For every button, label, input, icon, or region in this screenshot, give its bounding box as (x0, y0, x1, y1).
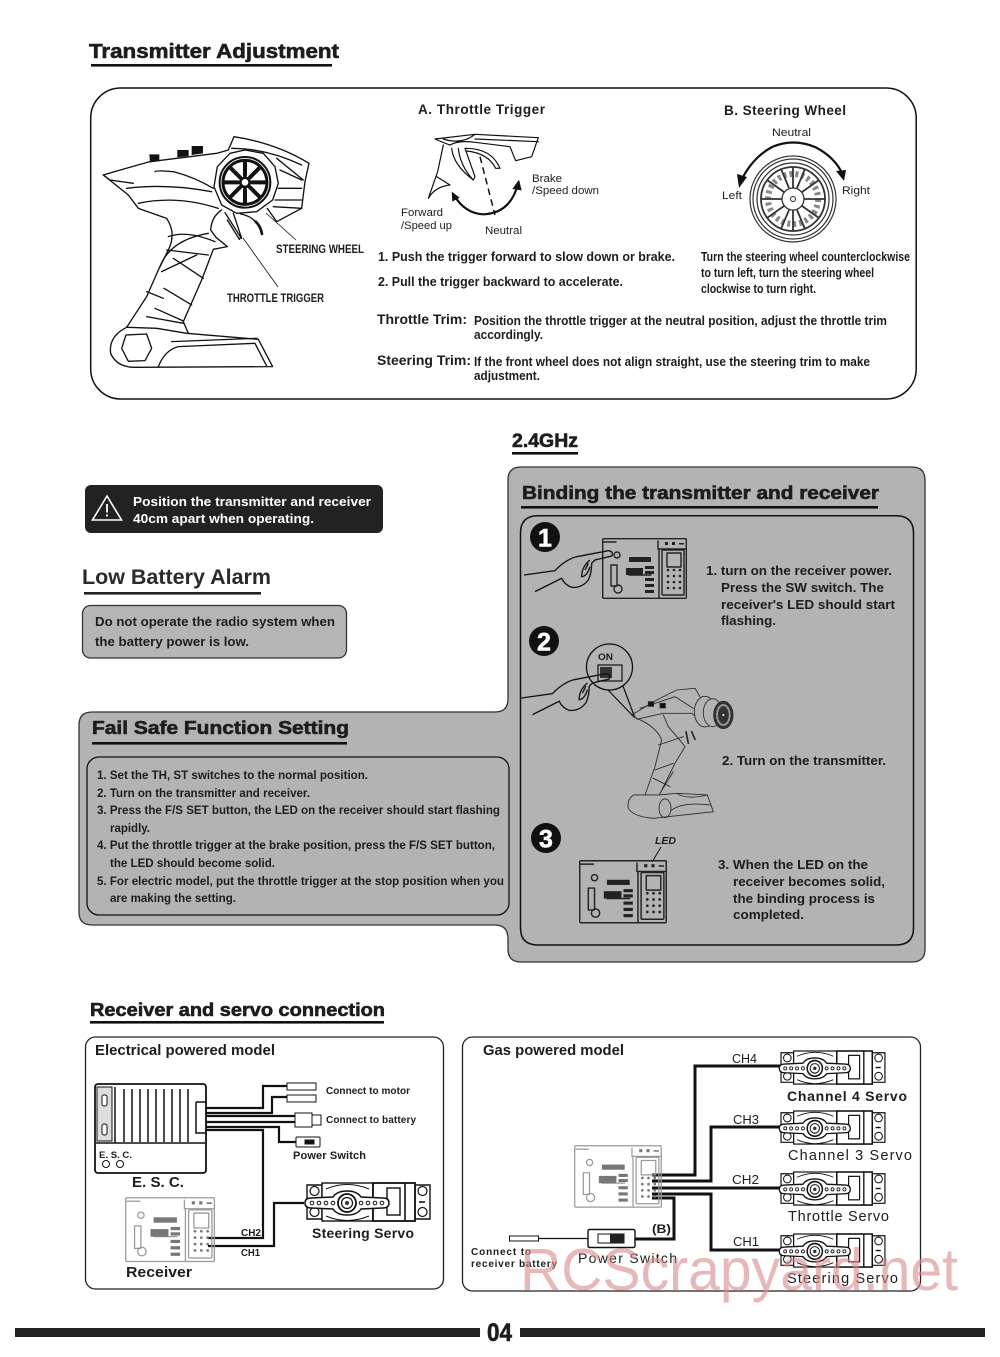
text: step 1: 1. turn on the receiver power. (706, 563, 892, 578)
heading: Low Battery Alarm: Low Battery Alarm (82, 566, 271, 589)
text: step 3: receiver becomes solid, (733, 874, 885, 889)
label: E.S.C.: E. S. C. (132, 1174, 184, 1191)
text: step 3 (718, 857, 885, 922)
step number 1 (530, 522, 560, 552)
labels: servos: Channel 3 Servo (788, 1148, 912, 1164)
labels: servos: Steering Servo (787, 1271, 898, 1287)
text: step 1: Press the SW switch. The (721, 580, 884, 595)
panel: fail safe steps: rapidly. (110, 821, 150, 835)
heading: Fail Safe Function Setting: Fail Safe Function Setting (92, 717, 349, 738)
heading: Gas powered model (483, 1043, 624, 1059)
callout: warning: Position the transmitter and receiver (133, 494, 371, 509)
wiring (635, 1066, 782, 1250)
text: throttle trim: Position the throttle trigger at the neutral position, adjust the throttle trim (474, 313, 887, 328)
icon: pressing hand (521, 674, 610, 715)
labels: channels: CH1 (733, 1234, 759, 1249)
connectors (287, 1083, 321, 1147)
icon: channel 4 servo (779, 1051, 885, 1084)
text: steering trim (377, 352, 870, 383)
footer: page number (15, 1319, 985, 1347)
labels: steering directions: Right (842, 185, 870, 197)
panel: transmitter adjustment (91, 88, 916, 399)
step number 1: 1 (538, 524, 552, 552)
wiring (206, 1086, 304, 1246)
labels: channels: CH4 (732, 1051, 757, 1066)
labels: connection targets (293, 1086, 416, 1162)
panel: low battery text: the battery power is low. (95, 634, 249, 649)
icon: power switch (510, 1230, 635, 1248)
step 3 (531, 823, 885, 923)
text: throttle instructions: 2. Pull the trigger backward to accelerate. (378, 274, 623, 289)
labels: steering directions (722, 127, 870, 202)
text: throttle instructions (378, 249, 675, 289)
watermark: RCScrapyard.net (520, 1237, 958, 1303)
step number 2: 2 (537, 628, 551, 656)
icon: E.S.C. unit (95, 1084, 206, 1173)
icon: channel 3 servo (779, 1111, 885, 1144)
panel: fail safe steps: the LED should become solid. (110, 856, 275, 870)
text: steering instructions (701, 250, 910, 296)
panel: fail safe steps: are making the setting. (110, 891, 236, 905)
panel: fail safe steps: 5. For electric model, put the throttle trigger at the stop position when you (97, 874, 504, 888)
text: step 3: completed. (733, 907, 804, 922)
label: STEERING WHEEL: STEERING WHEEL (276, 244, 364, 256)
icon: steering servo (305, 1183, 430, 1221)
labels: connection targets: Connect to motor (326, 1086, 410, 1097)
text: step 3: the binding process is (733, 891, 875, 906)
labels: throttle directions (401, 173, 599, 237)
panel: fail safe steps: 3. Press the F/S SET button, the LED on the receiver should start flashing (97, 803, 500, 817)
labels: throttle directions: Brake (532, 173, 562, 185)
illustration: transmitter (103, 137, 309, 367)
footer: page number: 04 (487, 1319, 512, 1347)
labels: power switch: Power Switch (578, 1250, 677, 1266)
labels: servos: Channel 4 Servo (787, 1088, 907, 1104)
label: STEERING WHEEL (266, 213, 364, 256)
step number 3 (531, 823, 561, 854)
icon: E.S.C. unit: E. S. C. (99, 1150, 132, 1161)
icon: throttle servo (779, 1172, 885, 1205)
heading: 2.4GHz: 2.4GHz (512, 431, 578, 452)
labels: throttle directions: /Speed down (532, 185, 599, 197)
labels: steering directions: Left (722, 190, 742, 202)
label: LED (652, 835, 676, 862)
labels: channels: CH2 (732, 1172, 759, 1187)
diagram: steering wheel (737, 142, 846, 242)
heading: B. Steering Wheel: B. Steering Wheel (724, 103, 846, 118)
text: steering trim: adjustment. (474, 368, 540, 383)
text: step 3: 3. When the LED on the (718, 857, 868, 872)
panel: fail safe steps: 2. Turn on the transmitter and receiver. (97, 786, 310, 800)
panel: low battery text: Do not operate the radio system when (95, 614, 335, 629)
labels: connection targets: Connect to battery (326, 1115, 416, 1126)
panel: binding steps (520, 516, 914, 945)
heading: A. Throttle Trigger: A. Throttle Trigger (418, 102, 546, 117)
labels: channels: CH3 (733, 1112, 759, 1127)
callout: warning (85, 485, 383, 533)
icon: receiver (580, 861, 666, 923)
label: THROTTLE TRIGGER (227, 238, 325, 305)
text: step 2: 2. Turn on the transmitter. (722, 753, 886, 768)
step 2 (521, 626, 886, 818)
panel: electrical powered model (86, 1037, 444, 1289)
labels: channels (732, 1051, 759, 1249)
step 1 (524, 522, 896, 628)
callout: ON switch (586, 644, 635, 718)
step number 3: 3 (539, 826, 553, 854)
panel: fail safe steps: 4. Put the throttle trigger at the brake position, press the F/S SET button, (97, 838, 495, 852)
icon: pressing hand (524, 551, 612, 592)
text: throttle trim (377, 311, 887, 342)
text: step 1 (706, 563, 896, 628)
icon: receiver (126, 1198, 214, 1262)
labels: servos: Throttle Servo (788, 1209, 889, 1225)
icon: receiver (575, 1146, 661, 1207)
labels: throttle directions: /Speed up (401, 220, 452, 232)
text: step 1: flashing. (721, 613, 776, 628)
panel: fail safe steps: 1. Set the TH, ST switches to the normal position. (97, 768, 368, 782)
labels: channels (241, 1228, 261, 1259)
labels: channels: CH2 (241, 1228, 261, 1239)
diagram: throttle trigger (428, 134, 538, 215)
text: throttle trim: accordingly. (474, 327, 543, 342)
labels: power switch: receiver battery (471, 1259, 557, 1270)
text: steering instructions: clockwise to turn right. (701, 282, 816, 296)
panel: low battery text (82, 606, 346, 658)
labels: throttle directions: Neutral (485, 225, 522, 237)
text: throttle instructions: 1. Push the trigger forward to slow down or brake. (378, 249, 675, 264)
labels: throttle directions: Forward (401, 207, 443, 219)
label: Steering Servo: Steering Servo (312, 1225, 414, 1241)
heading: Binding the transmitter and receiver: Binding the transmitter and receiver (522, 482, 879, 503)
text: step 1: receiver's LED should start (721, 597, 896, 612)
label: LED: LED (655, 835, 676, 847)
text: steering instructions: to turn left, turn the steering wheel (701, 266, 874, 280)
text: steering trim: Steering Trim: (377, 352, 471, 368)
illustration: transmitter (628, 688, 733, 818)
text: throttle trim: Throttle Trim: (377, 311, 467, 327)
panel: gas powered model (462, 1037, 920, 1291)
labels: servos (787, 1088, 912, 1287)
icon: steering servo (779, 1234, 885, 1267)
heading: Receiver and servo connection: Receiver and servo connection (90, 999, 385, 1020)
title: Transmitter Adjustment: Transmitter Adjustment (89, 41, 339, 63)
callout: warning: 40cm apart when operating. (133, 511, 314, 526)
labels: connection targets: Power Switch (293, 1150, 366, 1162)
heading: Electrical powered model (95, 1043, 275, 1059)
labels: power switch (471, 1222, 677, 1270)
labels: power switch: (B) (652, 1222, 671, 1236)
label: Receiver: Receiver (126, 1264, 192, 1281)
labels: steering directions: Neutral (772, 127, 811, 139)
panel: gray binding and fail safe background (79, 467, 925, 962)
step number 2 (529, 626, 559, 656)
icon: receiver (603, 539, 686, 598)
labels: power switch: Connect to (471, 1247, 531, 1258)
callout: ON switch: ON (598, 652, 613, 663)
label: THROTTLE TRIGGER: THROTTLE TRIGGER (227, 293, 325, 305)
labels: channels: CH1 (241, 1248, 260, 1259)
panel: fail safe steps (87, 757, 509, 915)
text: steering instructions: Turn the steering wheel counterclockwise (701, 250, 910, 264)
text: steering trim: If the front wheel does not align straight, use the steering trim to make (474, 354, 870, 369)
